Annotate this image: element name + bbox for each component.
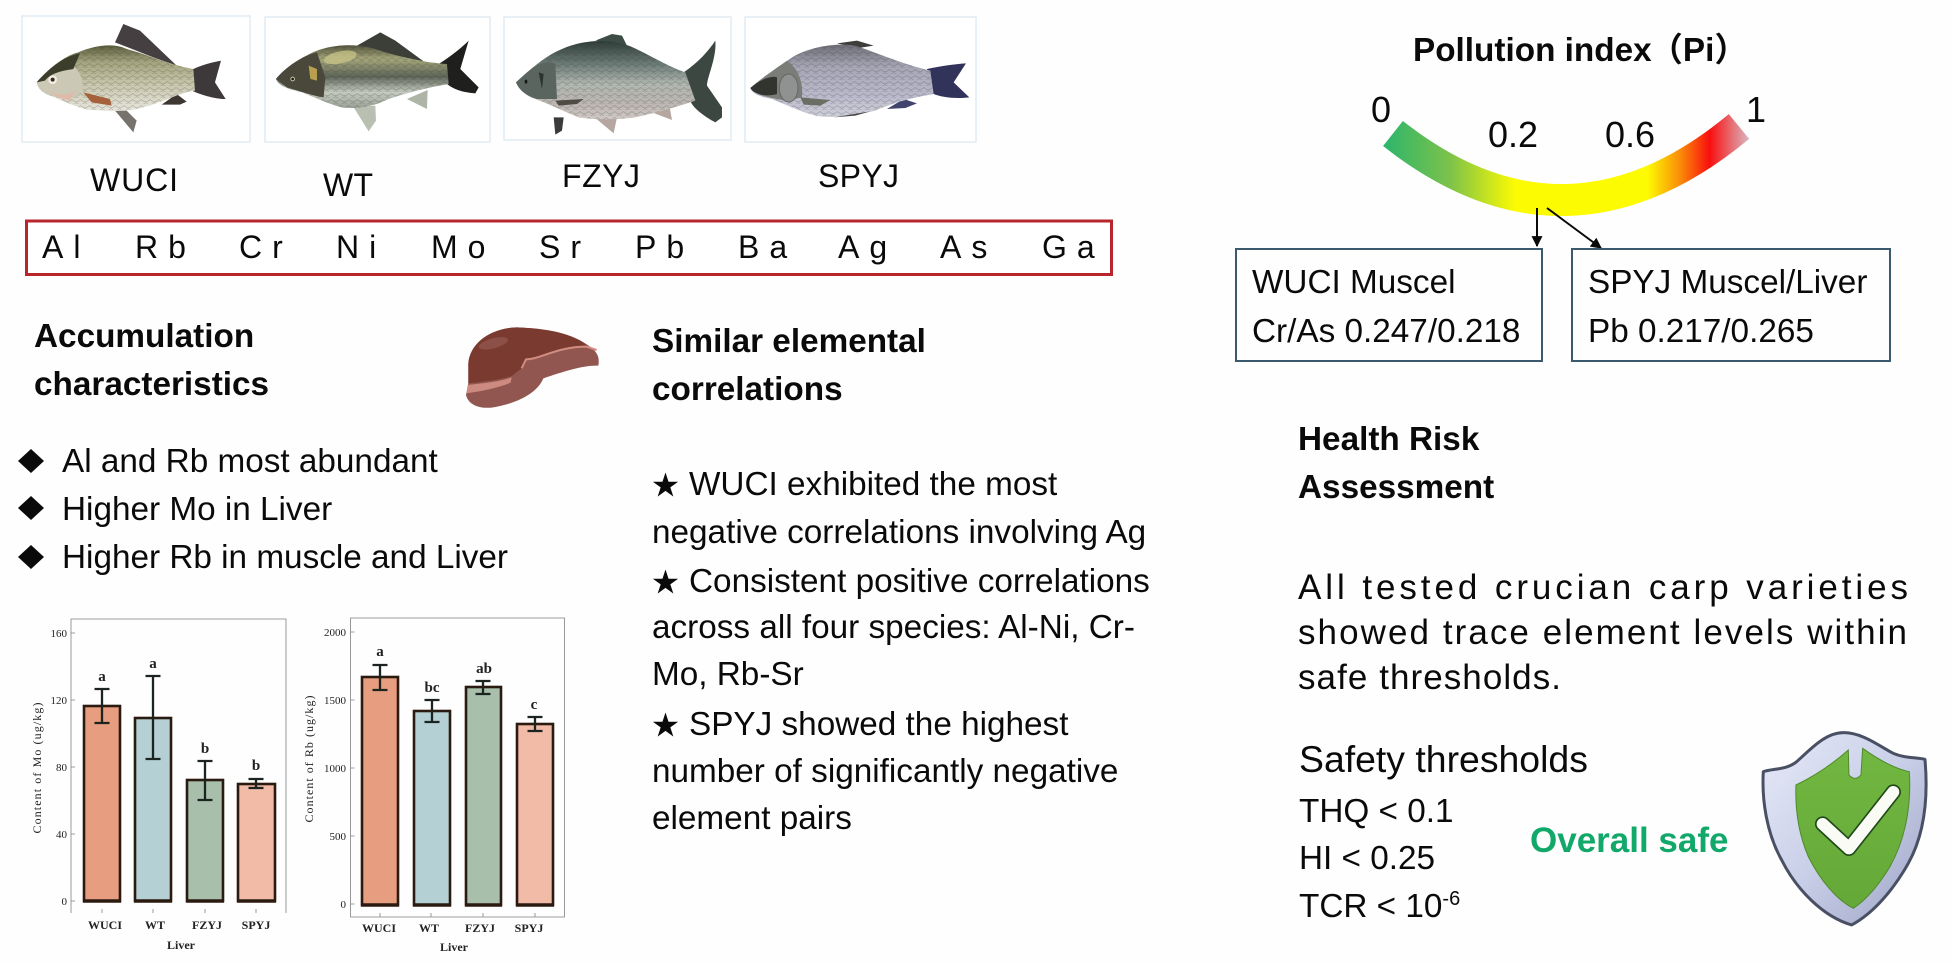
callout: WUCI muscle values: Cr/As 0.247/0.218 — [1252, 313, 1520, 350]
callout: WUCI muscle values: WUCI Muscel — [1252, 264, 1456, 301]
element list box: Ni — [336, 229, 386, 265]
accumulation bullet list — [18, 443, 508, 576]
bar chart: Rb content in liver: Liver — [440, 940, 469, 954]
element list box: Cr — [239, 229, 293, 265]
text block: correlation findings: element pairs — [652, 800, 852, 837]
icon: liver — [466, 327, 599, 408]
label: WUCI: WUCI — [90, 162, 178, 198]
bar chart: Mo content in liver: FZYJ — [192, 918, 222, 932]
bar chart: Rb content in liver: 500 — [330, 831, 346, 843]
callout: SPYJ muscle and liver values: Pb 0.217/0.265 — [1588, 313, 1814, 350]
icon: shield with check mark — [1763, 733, 1926, 925]
fish photo: FZYJ — [504, 17, 731, 140]
bar chart: Mo content in liver — [30, 619, 286, 952]
bar chart: Mo content in liver: a — [98, 669, 106, 685]
fish photo: WT — [265, 17, 490, 142]
text block: correlation findings: ★ — [652, 711, 679, 741]
heading: accumulation characteristics — [34, 318, 269, 403]
bar chart: Rb content in liver: 1500 — [324, 695, 346, 707]
text block: safety thresholds: THQ < 0.1 — [1299, 793, 1454, 830]
bar chart: Rb content in liver: 2000 — [324, 627, 346, 639]
bar chart: Rb content in liver: Content of Rb (ug/kg) — [302, 696, 316, 822]
element list box: As — [940, 229, 997, 265]
bar chart: Rb content in liver: 0 — [340, 899, 346, 911]
callout: SPYJ muscle and liver values: SPYJ Muscel/Liver — [1588, 264, 1867, 301]
text block: correlation findings: SPYJ showed the highest — [689, 706, 1068, 743]
arrow: to SPYJ box — [1547, 208, 1601, 248]
text block: safety conclusion — [1298, 568, 1908, 697]
bar chart: Mo content in liver: 160 — [50, 628, 68, 640]
text block: safety thresholds: TCR < 10 — [1299, 888, 1442, 925]
bullet: Mo: Higher Mo in Liver — [62, 491, 332, 528]
label: overall safe: Overall safe — [1530, 821, 1728, 860]
fish photo: WUCI — [22, 16, 250, 142]
text block: correlation findings: across all four species: Al-Ni, Cr- — [652, 609, 1135, 646]
text block: safety thresholds: Safety thresholds — [1299, 738, 1588, 780]
text block: safety thresholds: -6 — [1442, 888, 1460, 910]
bar chart: Rb content in liver: c — [531, 697, 538, 713]
text block: safety conclusion: All tested crucian carp varieties — [1298, 568, 1908, 607]
bar chart: Rb content in liver: a — [376, 644, 384, 660]
bullet: Rb: Higher Rb in muscle and Liver — [62, 539, 508, 576]
bar chart: Mo content in liver: b — [252, 758, 260, 774]
bullet: Al and Rb: Al and Rb most abundant — [62, 443, 438, 480]
bar chart: Rb content in liver: 1000 — [324, 763, 346, 775]
element list box: Ga — [1042, 229, 1105, 265]
bar chart: Rb content in liver: ab — [476, 661, 492, 677]
element list box: Rb — [135, 229, 196, 265]
text block: correlation findings: ★ — [652, 471, 679, 501]
heading: health risk assessment — [1298, 421, 1494, 506]
heading: similar elemental correlations: correlations — [652, 371, 843, 408]
element list box: Al — [42, 229, 90, 265]
text block: safety thresholds — [1299, 738, 1588, 925]
gauge: pollution index scale: 1 — [1746, 89, 1766, 130]
callout: WUCI muscle values — [1236, 249, 1542, 361]
bar chart: Rb content in liver: FZYJ — [465, 921, 495, 935]
gauge: pollution index scale: 0.6 — [1605, 114, 1655, 155]
callout: SPYJ muscle and liver values — [1572, 249, 1890, 361]
element list box: Sr — [539, 229, 591, 265]
heading: similar elemental correlations — [652, 323, 926, 408]
text block: safety conclusion: safe thresholds. — [1298, 658, 1561, 697]
bar chart: Mo content in liver: a — [149, 656, 157, 672]
element list box: Mo — [431, 229, 495, 265]
heading: accumulation characteristics: characteristics — [34, 366, 269, 403]
text block: correlation findings: WUCI exhibited the most — [689, 466, 1057, 503]
bar chart: Mo content in liver: WT — [145, 918, 165, 932]
heading: health risk assessment: Health Risk — [1298, 421, 1480, 458]
heading: accumulation characteristics: Accumulation — [34, 318, 254, 355]
text block: safety conclusion: showed trace element levels within — [1298, 613, 1907, 652]
text block: correlation findings: Mo, Rb-Sr — [652, 656, 804, 693]
bar chart: Mo content in liver: Liver — [167, 938, 196, 952]
heading: health risk assessment: Assessment — [1298, 469, 1494, 506]
element list box: Pb — [635, 229, 694, 265]
bar chart: Mo content in liver: WUCI — [88, 918, 122, 932]
fish photo: SPYJ — [745, 17, 976, 142]
heading: similar elemental correlations: Similar elemental — [652, 323, 926, 360]
bar chart: Mo content in liver: 0 — [62, 896, 68, 908]
gauge: pollution index scale: 0.2 — [1488, 114, 1538, 155]
text block: correlation findings: Consistent positive correlations — [689, 563, 1150, 600]
arrow: to WUCI box — [1536, 208, 1538, 246]
bar chart: Rb content in liver: bc — [424, 680, 440, 696]
panel: fish varieties — [22, 16, 976, 203]
gauge: pollution index scale — [1371, 89, 1766, 200]
label: FZYJ: FZYJ — [562, 158, 640, 194]
label: SPYJ: SPYJ — [818, 158, 899, 194]
bar chart: Mo content in liver: 120 — [50, 695, 68, 707]
bar chart: Mo content in liver: Content of Mo (ug/kg) — [30, 702, 44, 834]
text block: correlation findings: ★ — [652, 568, 679, 598]
text block: safety thresholds: HI < 0.25 — [1299, 840, 1435, 877]
label: WT: WT — [323, 167, 373, 203]
text block: correlation findings: negative correlations involving Ag — [652, 514, 1146, 551]
element list box: Ag — [838, 229, 897, 265]
bar chart: Rb content in liver: WT — [419, 921, 439, 935]
text block: correlation findings — [652, 466, 1150, 837]
bar chart: Mo content in liver: b — [201, 741, 209, 757]
bar chart: Mo content in liver: SPYJ — [242, 918, 270, 932]
bar chart: Rb content in liver: SPYJ — [515, 921, 543, 935]
title: pollution index: Pollution index（Pi） — [1413, 32, 1748, 69]
bar chart: Mo content in liver: 80 — [56, 762, 68, 774]
bar chart: Rb content in liver — [302, 618, 564, 954]
element list box: Ba — [738, 229, 797, 265]
bar chart: Mo content in liver: 40 — [56, 829, 68, 841]
bar chart: Rb content in liver: WUCI — [362, 921, 396, 935]
gauge: pollution index scale: 0 — [1371, 89, 1391, 130]
text block: correlation findings: number of significantly negative — [652, 753, 1118, 790]
element list box — [26, 221, 1112, 274]
